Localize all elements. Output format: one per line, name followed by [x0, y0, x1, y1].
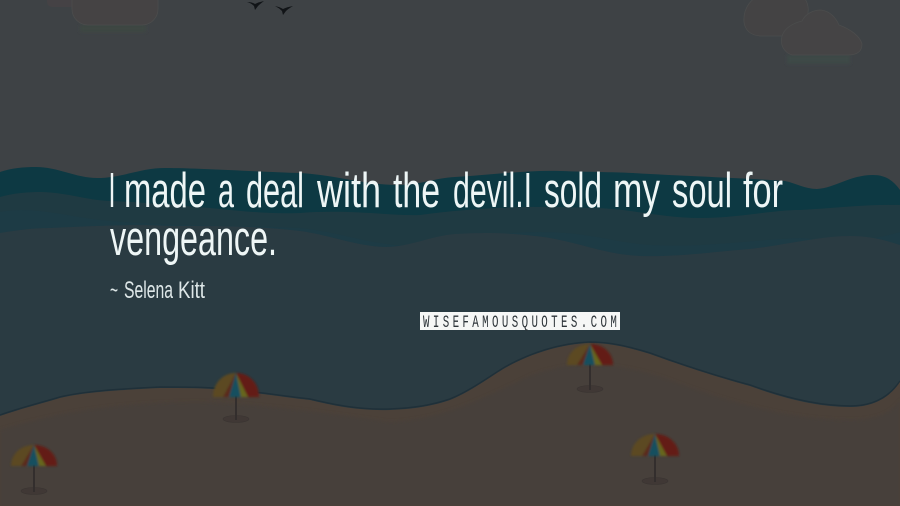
- quote line 1: deal: [246, 164, 304, 218]
- quote line 1: with: [316, 164, 381, 218]
- umbrella: lower right: [631, 434, 679, 484]
- sea: top wave: [0, 167, 900, 506]
- cloud: top left: [47, 0, 158, 32]
- umbrella: hilltop: [567, 344, 613, 392]
- umbrella: far left: [11, 445, 57, 494]
- beach shoreline shadow: [0, 342, 900, 415]
- sea: third wave: [0, 210, 900, 506]
- cloud: top right: [744, 0, 862, 64]
- quote line 1: a: [218, 164, 234, 218]
- sea: second wave: [0, 192, 900, 506]
- bird 1: [247, 1, 264, 10]
- sea: main water: [0, 225, 900, 506]
- beach sand: [0, 343, 900, 506]
- beach sand lower tone: [0, 365, 900, 506]
- umbrella: left shore: [213, 373, 259, 422]
- quote line 1: sold: [544, 164, 602, 218]
- birds: [247, 1, 293, 15]
- quote line 1: made: [124, 164, 206, 218]
- quote line 1: the: [393, 164, 440, 218]
- quote line 2: vengeance.: [110, 212, 277, 266]
- quote line 1: for: [743, 164, 783, 218]
- quote text: [108, 164, 783, 266]
- quote line 1: my: [613, 164, 660, 218]
- bird 2: [275, 6, 293, 15]
- author: Selena: [124, 277, 173, 304]
- watermark badge: WISEFAMOUSQUOTES.COM: [423, 314, 617, 333]
- quote line 1: I: [108, 164, 116, 218]
- author: ~: [110, 277, 118, 304]
- quote line 1: soul: [672, 164, 732, 218]
- author: Kitt: [178, 277, 205, 304]
- quote line 1: devil.I: [453, 164, 532, 218]
